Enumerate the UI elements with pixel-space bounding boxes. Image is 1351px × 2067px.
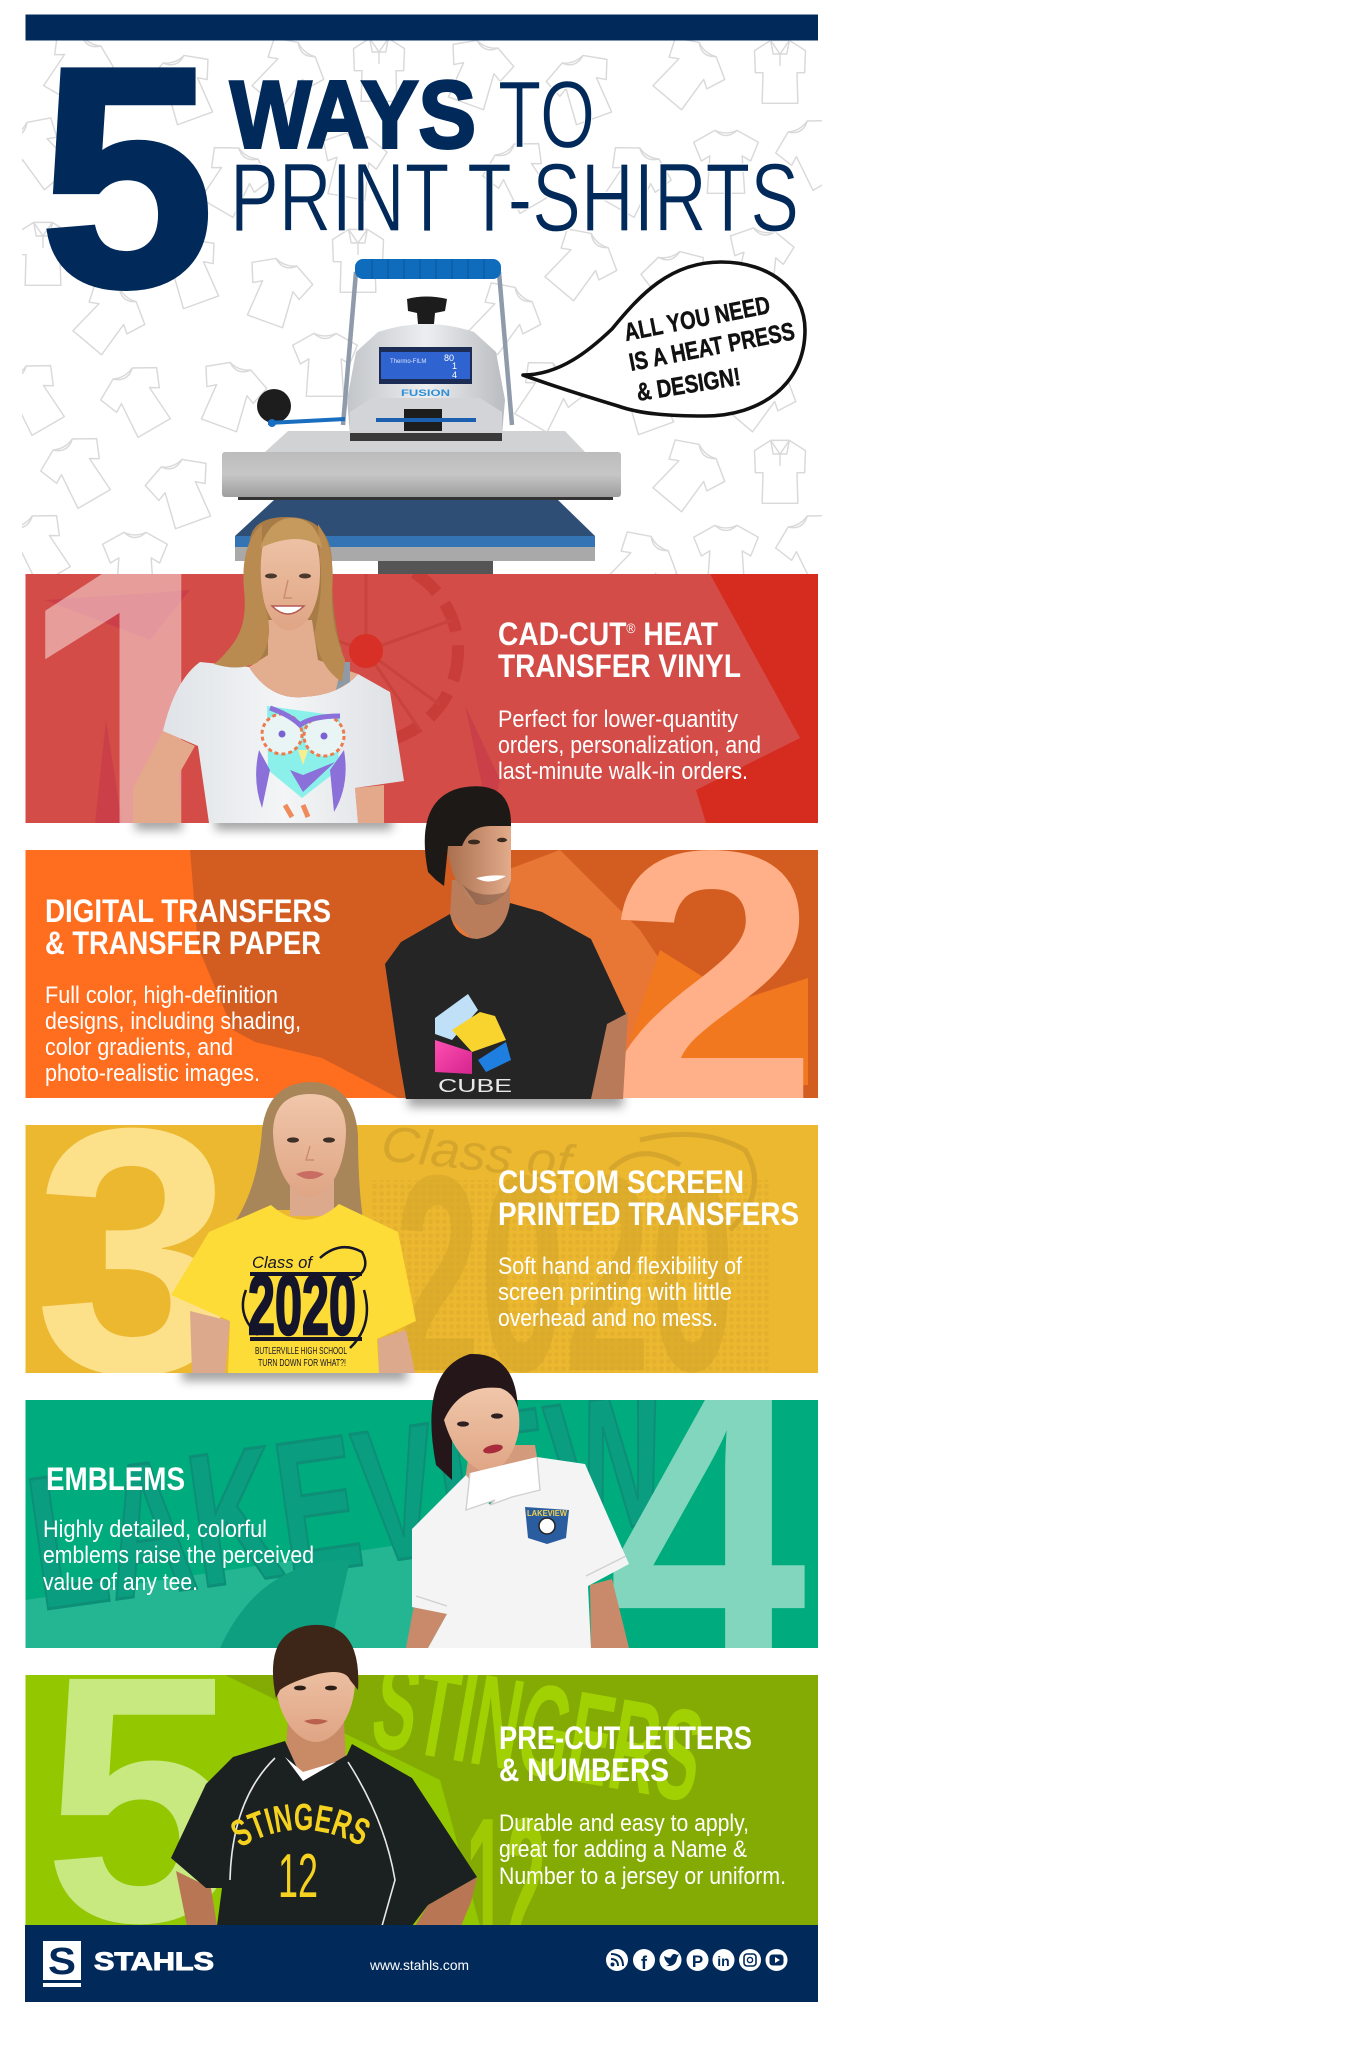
yellow tee xyxy=(171,1204,416,1373)
icon: linkedin xyxy=(712,1949,734,1971)
heading: EMBLEMS xyxy=(46,1461,185,1497)
woman in white tee with owl xyxy=(133,517,404,823)
platen xyxy=(222,452,621,497)
social icons xyxy=(606,1949,788,1973)
arms xyxy=(398,1050,420,1099)
drop shadow xyxy=(182,1364,407,1381)
lower body panel xyxy=(350,398,502,435)
drop shadow xyxy=(135,814,392,830)
bubble text: IS A HEAT PRESS xyxy=(627,317,797,377)
touch screen xyxy=(379,347,472,384)
face xyxy=(444,1388,519,1474)
bubble text xyxy=(622,291,797,407)
press arms xyxy=(343,272,512,425)
jersey lettering: 12 xyxy=(278,1842,318,1911)
face xyxy=(273,1094,346,1197)
body text: photo-realistic images. xyxy=(45,1060,260,1087)
body text: last-minute walk-in orders. xyxy=(498,758,748,785)
body text: Perfect for lower-quantity xyxy=(498,706,738,733)
panel background xyxy=(26,574,818,823)
emblem xyxy=(525,1507,569,1544)
speech bubble xyxy=(523,262,805,416)
numeral 2: 2 xyxy=(605,778,819,1174)
eyes and smile xyxy=(265,574,311,614)
neck xyxy=(285,1720,346,1785)
man in black jersey xyxy=(171,1624,477,1925)
polo cuff xyxy=(416,1556,626,1606)
logo mark xyxy=(43,1941,81,1987)
panel background: 2020 xyxy=(395,1118,735,1430)
heading xyxy=(45,893,331,961)
heading xyxy=(499,1720,752,1788)
heading: TRANSFER VINYL xyxy=(498,648,741,684)
neck xyxy=(450,880,510,945)
hair xyxy=(431,1354,518,1480)
emblem: LAKEVIEW xyxy=(527,1509,567,1518)
body text: Soft hand and flexibility of xyxy=(498,1253,742,1280)
body text: great for adding a Name & xyxy=(499,1836,747,1863)
tank strap xyxy=(336,662,350,690)
body text xyxy=(498,706,761,785)
panel background xyxy=(26,1125,818,1373)
panel: 2 digital transfers and transfer paper xyxy=(26,786,818,1114)
heading: & TRANSFER PAPER xyxy=(45,925,321,961)
touch screen: 1 xyxy=(452,361,457,371)
panel background xyxy=(26,1400,818,1648)
body text: Durable and easy to apply, xyxy=(499,1810,749,1837)
body text: orders, personalization, and xyxy=(498,732,761,759)
heading: PRINTED TRANSFERS xyxy=(498,1196,799,1232)
top plate xyxy=(265,431,585,452)
icon: pinterest: P xyxy=(692,1952,703,1971)
press body xyxy=(347,324,505,435)
numeral 5: 5 xyxy=(43,1602,239,1996)
panel: 1 cad-cut heat transfer vinyl xyxy=(26,517,818,836)
panel background: LAKEVIEW xyxy=(16,1352,680,1651)
heading: & NUMBERS xyxy=(499,1752,669,1788)
body text: screen printing with little xyxy=(498,1279,732,1306)
owl print xyxy=(256,706,346,817)
jersey lettering: STINGERS xyxy=(231,1804,370,1846)
top navy bar xyxy=(26,14,818,40)
body text xyxy=(499,1810,786,1890)
cube logo xyxy=(435,994,511,1074)
woman in yellow tee xyxy=(171,1082,416,1373)
arms xyxy=(190,1311,230,1373)
icon: linkedin: in xyxy=(717,1953,730,1969)
title xyxy=(40,4,799,352)
tee graphic: 2020 xyxy=(248,1258,356,1352)
heading: ® xyxy=(626,620,636,636)
lower blue pad xyxy=(235,500,595,536)
hair front locks xyxy=(214,524,269,668)
white collar and piping xyxy=(285,1757,336,1781)
face features xyxy=(294,1686,337,1724)
body text: emblems raise the perceived xyxy=(43,1542,314,1569)
panel background: STINGERS xyxy=(363,1629,713,1830)
long hair xyxy=(232,1082,364,1226)
black tee xyxy=(385,903,626,1099)
heading xyxy=(498,1164,799,1232)
arms xyxy=(176,1871,217,1926)
icon: youtube xyxy=(766,1949,788,1971)
black jersey xyxy=(171,1741,477,1926)
logo mark: S xyxy=(48,1941,76,1983)
panel background xyxy=(26,1675,818,1925)
body text: Full color, high-definition xyxy=(45,982,278,1009)
face xyxy=(446,818,511,904)
neck and chest xyxy=(249,620,358,697)
body text: Number to a jersey or uniform. xyxy=(499,1863,786,1890)
heading: CUSTOM SCREEN xyxy=(498,1164,744,1200)
body text xyxy=(43,1516,314,1596)
polo collar xyxy=(466,1457,540,1510)
body text xyxy=(45,982,301,1087)
icon: facebook xyxy=(633,1949,655,1973)
woman in white polo xyxy=(406,1354,629,1648)
ball lever xyxy=(257,389,345,427)
icon: pinterest xyxy=(686,1949,708,1971)
white polo xyxy=(412,1457,629,1648)
jersey lettering xyxy=(231,1804,370,1911)
panel: 4 emblems xyxy=(26,1354,818,1648)
icon: instagram xyxy=(739,1949,761,1971)
heading: DIGITAL TRANSFERS xyxy=(45,893,331,929)
bubble text: & DESIGN! xyxy=(635,363,743,407)
tee graphic: BUTLERVILLE HIGH SCHOOL xyxy=(255,1346,347,1357)
heat press illustration xyxy=(222,259,621,575)
touch screen: 4 xyxy=(452,370,457,380)
man in black tee xyxy=(385,786,628,1099)
body text xyxy=(498,1253,742,1332)
touch screen: 80 xyxy=(444,353,454,363)
panel: 3 custom screen printed transfers xyxy=(26,1082,818,1388)
numeral 3: 3 xyxy=(34,1056,234,1447)
icon: facebook: f xyxy=(641,1953,648,1973)
bubble outline xyxy=(523,262,805,416)
background t-shirt pattern xyxy=(0,24,857,613)
top knob xyxy=(407,296,447,324)
drop shadow xyxy=(408,1090,623,1107)
footer xyxy=(25,1925,818,2002)
blue handle xyxy=(355,259,501,279)
logo wordmark: STAHLS xyxy=(94,1948,214,1976)
heading: PRE-CUT LETTERS xyxy=(499,1720,752,1756)
face features xyxy=(462,838,507,905)
footer bar xyxy=(25,1925,818,2002)
face features xyxy=(287,1137,335,1179)
panel background: Class of xyxy=(379,1115,579,1191)
title line 1 bold: WAYS xyxy=(230,62,476,168)
neck xyxy=(290,1180,334,1216)
website: www.stahls.com xyxy=(369,1957,469,1973)
icon: twitter xyxy=(660,1949,682,1971)
bubble text: ALL YOU NEED xyxy=(622,291,772,347)
numeral 1: 1 xyxy=(14,464,265,966)
body text: Highly detailed, colorful xyxy=(43,1516,267,1543)
tee graphic: Class of xyxy=(252,1253,314,1272)
title line 2: PRINT T-SHIRTS xyxy=(230,143,799,252)
panel: 5 pre-cut letters and numbers xyxy=(26,1624,818,1925)
hair back xyxy=(250,517,342,680)
heading: HEAT xyxy=(636,616,718,652)
icon: rss xyxy=(606,1949,628,1971)
tee graphic: TURN DOWN FOR WHAT?! xyxy=(258,1358,346,1369)
white tee xyxy=(163,662,404,823)
body text: value of any tee. xyxy=(43,1569,198,1596)
cube label: CUBE xyxy=(438,1076,512,1096)
title line 1 light: TO xyxy=(498,62,595,168)
front pen slot xyxy=(376,409,476,435)
dark hair xyxy=(425,786,511,886)
face features xyxy=(457,1413,504,1455)
neck xyxy=(465,1445,540,1510)
heading xyxy=(498,616,741,684)
touch screen: Thermo-FILM xyxy=(390,359,426,365)
body text: color gradients, and xyxy=(45,1034,233,1061)
body text: overhead and no mess. xyxy=(498,1305,718,1332)
brown hair xyxy=(273,1625,358,1698)
panel background: 12 xyxy=(466,1779,546,1991)
tee graphic xyxy=(243,1247,367,1369)
ear xyxy=(429,841,443,869)
fusion label: FUSION xyxy=(401,388,450,398)
numeral 4: 4 xyxy=(608,1287,809,1756)
arms xyxy=(406,1600,447,1648)
face xyxy=(260,524,320,630)
arms xyxy=(133,731,195,823)
face xyxy=(276,1650,355,1742)
big numeral 5: 5 xyxy=(40,4,214,352)
heading: CAD-CUT xyxy=(498,616,644,652)
body text: designs, including shading, xyxy=(45,1008,301,1035)
panel background xyxy=(26,850,818,1099)
